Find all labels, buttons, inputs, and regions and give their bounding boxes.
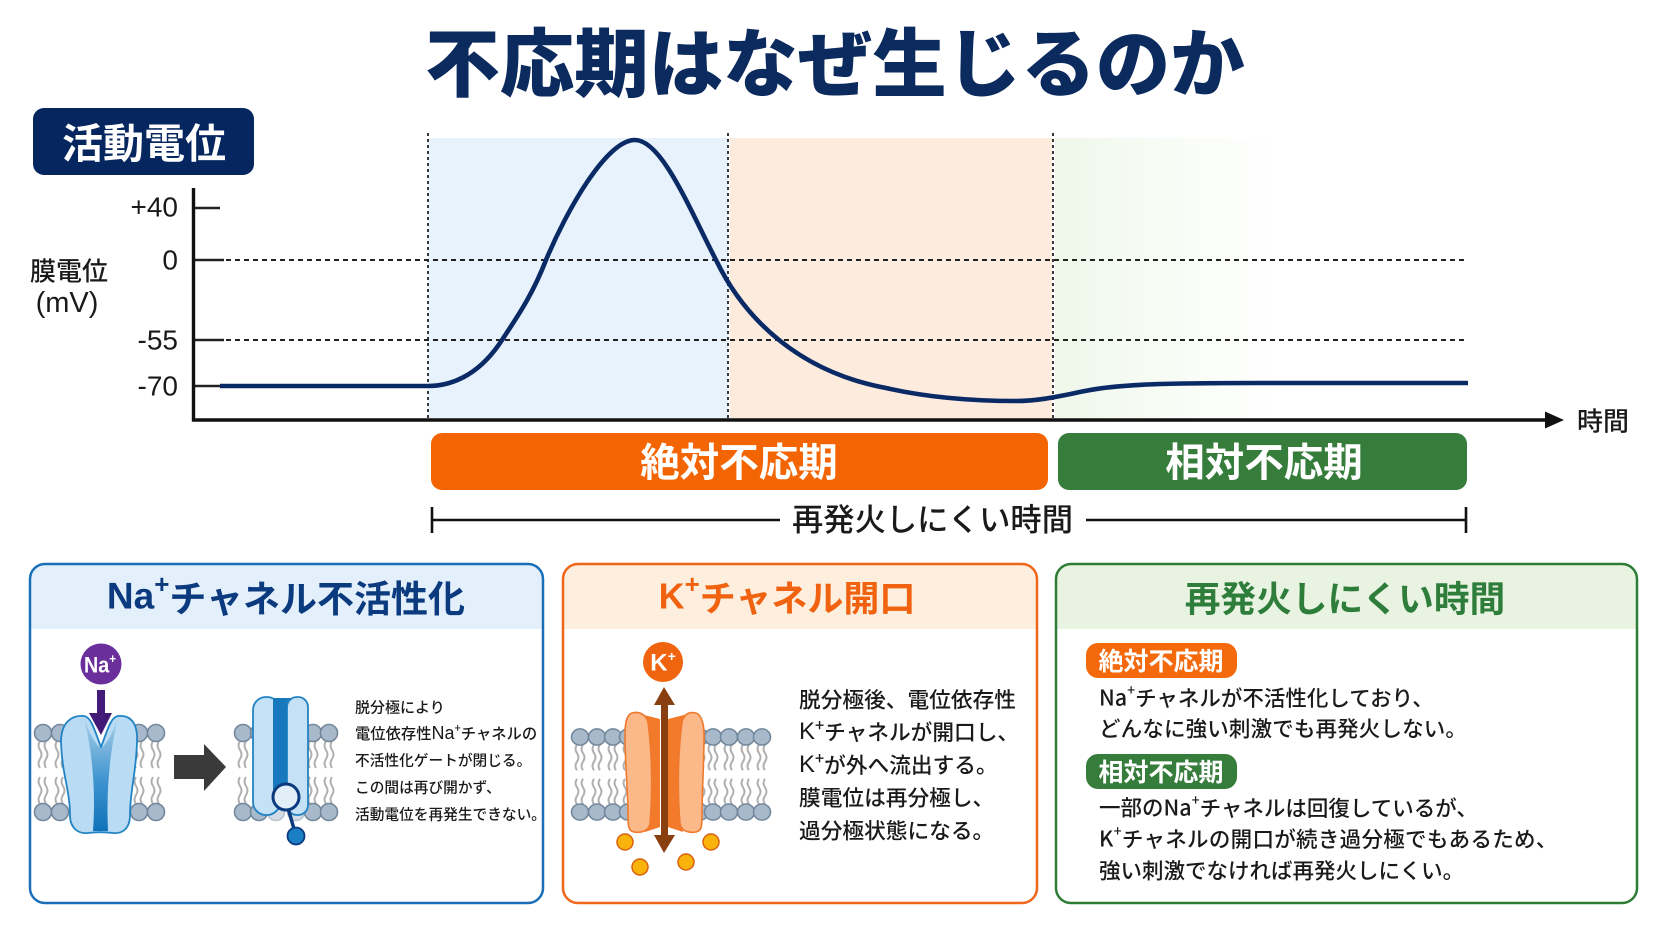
panel 2 heading: チャネル開口 xyxy=(700,570,915,622)
text: relative description: 一部のNa xyxy=(1099,792,1192,822)
membrane potential curve xyxy=(220,140,1468,401)
panel 1 heading: チャネル不活性化 xyxy=(169,569,465,623)
panel: Na channel inactivation xyxy=(30,564,546,903)
bracket: time hard to refire xyxy=(432,496,1466,540)
panel 2 heading: K xyxy=(659,576,685,616)
icon: K ion: + xyxy=(668,648,676,664)
panel 2 text: チャネルが開口し、 xyxy=(824,716,1019,746)
band: relative refractory green xyxy=(1055,138,1280,418)
y axis title: 膜電位 xyxy=(30,252,108,288)
icon: K channel xyxy=(572,712,770,832)
text: relative description: チャネルは回復しているが、 xyxy=(1200,792,1478,822)
bar: absolute refractory xyxy=(431,432,1048,490)
icon: open Na channel xyxy=(34,716,164,833)
y axis labels: +40 xyxy=(130,192,178,222)
panel 1 heading: Na xyxy=(107,576,154,616)
y axis title: (mV) xyxy=(36,287,98,319)
panel 2 text: + xyxy=(815,712,824,736)
panel 1 text: + xyxy=(455,720,461,736)
icon: K ion: K xyxy=(650,650,668,676)
panel 2 frame xyxy=(563,564,1037,903)
text: relative description: + xyxy=(1114,821,1122,841)
icon: Na ion: Na xyxy=(84,652,112,678)
panel 2 text: K xyxy=(799,750,815,778)
y axis labels: -70 xyxy=(138,370,178,402)
chart: action potential xyxy=(30,133,1629,438)
panel 3 heading: 再発火しにくい時間 xyxy=(1185,572,1505,622)
bracket: time hard to refire: 再発火しにくい時間 xyxy=(792,496,1073,540)
panel 1 heading: + xyxy=(154,569,169,599)
text: relative description xyxy=(1099,790,1558,886)
icon: inactivated Na channel xyxy=(234,697,338,844)
text: absolute description: + xyxy=(1127,680,1135,700)
text: absolute description: Na xyxy=(1099,682,1127,712)
x axis title: 時間 xyxy=(1577,402,1629,438)
icon: Na ion: + xyxy=(109,650,116,666)
panel 1 text: 不活性化ゲートが閉じる。 xyxy=(355,750,531,770)
pill: relative: 相対不応期 xyxy=(1098,753,1224,789)
text: relative description: チャネルの開口が続き過分極でもあるため、 xyxy=(1122,822,1558,854)
panel 2 text: + xyxy=(815,745,824,769)
y axis labels: -55 xyxy=(138,324,178,356)
text: relative description: K xyxy=(1099,822,1114,854)
y axis labels xyxy=(130,192,178,402)
panel: time hard to refire xyxy=(1056,564,1637,903)
panel 2 text xyxy=(799,684,1019,846)
bar: absolute refractory: 絶対不応期 xyxy=(640,432,838,488)
badge: 活動電位 xyxy=(33,108,254,175)
arrow: K efflux xyxy=(654,687,675,853)
panel 1 frame xyxy=(30,564,543,903)
panel 1 text: この間は再び開かず、 xyxy=(355,776,501,798)
panel 2 text: K xyxy=(799,718,815,744)
arrow: transition xyxy=(174,744,226,791)
panel 1 text: 電位依存性Na xyxy=(355,722,455,744)
panel: K channel opening xyxy=(563,564,1037,903)
panel 1 text: 脱分極により xyxy=(355,696,445,718)
band: absolute refractory orange xyxy=(730,138,1052,418)
panel 2 text: が外へ流出する。 xyxy=(824,748,998,780)
panel 2 text: 膜電位は再分極し、 xyxy=(799,782,994,812)
panel 1 text: 活動電位を再発生できない。 xyxy=(355,804,546,824)
arrow: Na influx xyxy=(89,690,112,735)
text: relative description: + xyxy=(1192,790,1200,810)
panel 2 text: 過分極状態になる。 xyxy=(799,814,994,846)
icon: K ion xyxy=(643,642,683,682)
y axis labels: 0 xyxy=(162,244,178,276)
text: absolute description xyxy=(1099,680,1467,744)
title: 不応期はなぜ生じるのか xyxy=(425,6,1245,112)
panel 2 text: 脱分極後、電位依存性 xyxy=(799,684,1016,714)
bar: relative refractory: 相対不応期 xyxy=(1165,432,1363,488)
panel 2 heading: + xyxy=(685,569,700,599)
y axis title xyxy=(30,252,108,319)
icon: Na ion xyxy=(80,644,122,684)
axes xyxy=(194,188,1564,428)
text: relative description: 強い刺激でなければ再発火しにくい。 xyxy=(1099,854,1464,886)
icon: K ions outside xyxy=(617,834,719,875)
badge: 活動電位: 活動電位 xyxy=(62,110,226,170)
panel 1 text: チャネルの xyxy=(461,722,537,744)
panel 1 text xyxy=(355,696,546,824)
panel 3 frame xyxy=(1056,564,1637,903)
text: absolute description: どんなに強い刺激でも再発火しない。 xyxy=(1099,712,1467,744)
bar: relative refractory xyxy=(1058,432,1467,490)
band: absolute refractory blue xyxy=(428,138,728,418)
text: absolute description: チャネルが不活性化しており、 xyxy=(1135,682,1434,712)
pill: absolute: 絶対不応期 xyxy=(1098,642,1224,678)
